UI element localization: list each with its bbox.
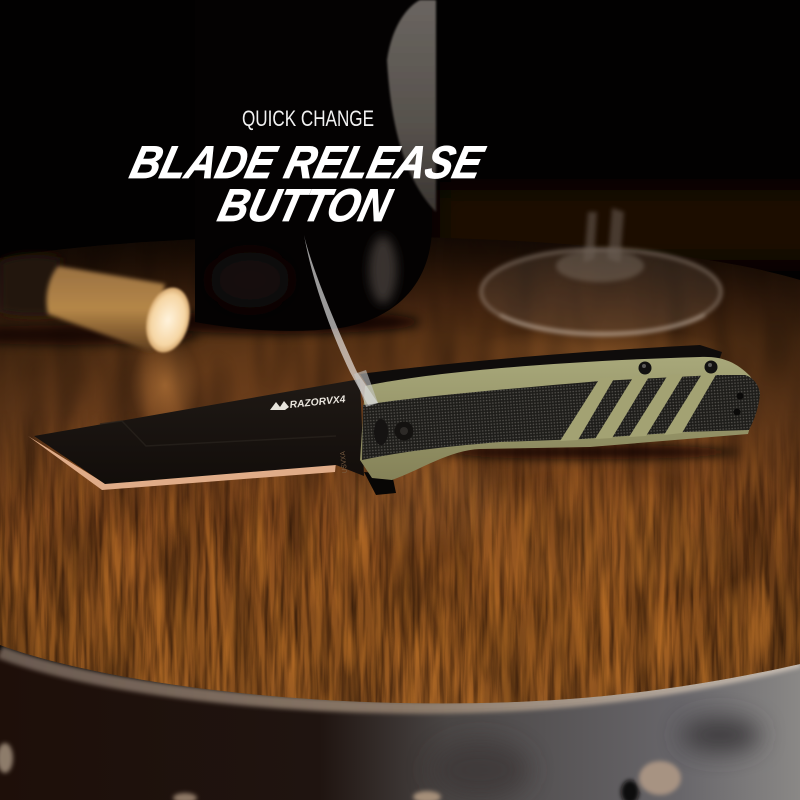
blade stamp: USVXA [340, 451, 349, 474]
callout pointer to release button [304, 235, 378, 405]
blade [28, 379, 364, 490]
blade logo text: RAZORVX4 [289, 394, 346, 411]
handle black inlay [362, 375, 760, 460]
title line 2: BUTTON [214, 180, 397, 231]
wooden table top [0, 222, 800, 712]
subtitle: QUICK CHANGE [242, 106, 374, 131]
handle frame and liner [360, 345, 722, 390]
knife shadow [440, 445, 740, 459]
green handle scale [360, 357, 760, 480]
wine glass base [481, 208, 721, 335]
barrel side [0, 650, 800, 800]
flipper tab [364, 472, 396, 495]
handle lanyard holes [734, 392, 744, 416]
barrel rivets [0, 743, 681, 800]
green handle stripes [560, 373, 717, 441]
handle pivot screw and release button [374, 419, 414, 445]
knife [28, 345, 760, 495]
wine cork [0, 255, 196, 357]
handle top screws [638, 360, 718, 374]
bottle [195, 0, 436, 331]
barrel rim [0, 652, 800, 707]
callout pointer band [354, 370, 378, 407]
title line 1: BLADE RELEASE [126, 137, 490, 188]
